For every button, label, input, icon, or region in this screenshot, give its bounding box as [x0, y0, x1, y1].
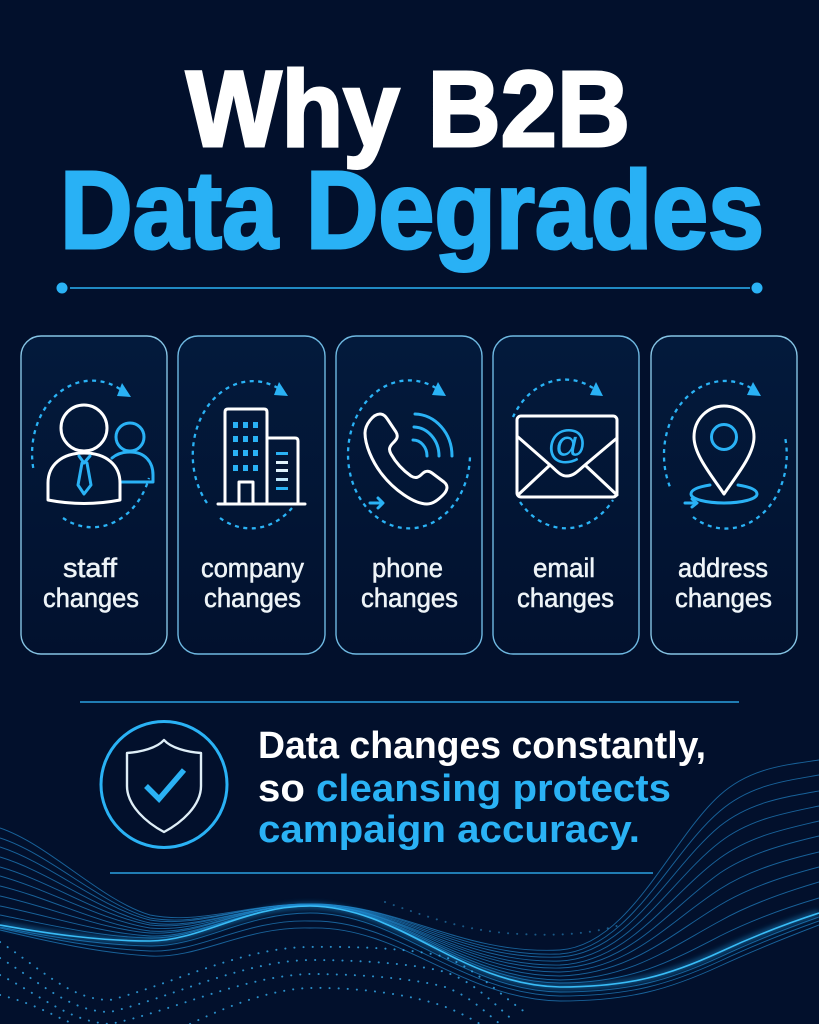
- icon: phone: [348, 380, 470, 528]
- label: email changes: changes: [517, 583, 614, 613]
- panel: staff changes: [21, 336, 167, 654]
- icon: email: @: [547, 423, 587, 467]
- label: phone changes: changes: [361, 583, 458, 613]
- callout bottom rule: [110, 872, 653, 874]
- label: phone changes: [361, 553, 458, 613]
- icon: location pin: [664, 381, 787, 529]
- label: address changes: address: [678, 553, 768, 583]
- label: email changes: email: [533, 553, 595, 583]
- label: company changes: changes: [204, 583, 301, 613]
- panel: company changes: [178, 336, 325, 654]
- callout text: so cleansing protects: [258, 768, 671, 810]
- label: email changes: [517, 553, 614, 613]
- label: staff changes: changes: [43, 583, 139, 613]
- callout text: campaign accuracy.: [258, 809, 640, 851]
- callout text: [258, 725, 706, 851]
- icon: company building: [193, 381, 305, 528]
- callout top rule: [80, 701, 739, 703]
- label: phone changes: phone: [372, 553, 443, 583]
- label: staff changes: [43, 553, 139, 613]
- wave graphic: [0, 760, 819, 1024]
- label: company changes: company: [201, 553, 304, 583]
- label: address changes: changes: [675, 583, 772, 613]
- label: address changes: [675, 553, 772, 613]
- title: Why B2B: Why B2B: [186, 48, 630, 169]
- panel: phone changes: [336, 336, 482, 654]
- icon: email: [513, 380, 617, 528]
- label: company changes: [201, 553, 304, 613]
- callout text: Data changes constantly,: [258, 725, 706, 767]
- label: staff changes: staff: [63, 553, 118, 583]
- icon: staff: [32, 381, 153, 527]
- panel: email changes: [493, 336, 639, 654]
- title: Data Degrades: Data Degrades: [60, 149, 764, 272]
- title divider: [56, 282, 762, 294]
- icon: shield badge: [101, 722, 227, 848]
- panel: address changes: [651, 336, 797, 654]
